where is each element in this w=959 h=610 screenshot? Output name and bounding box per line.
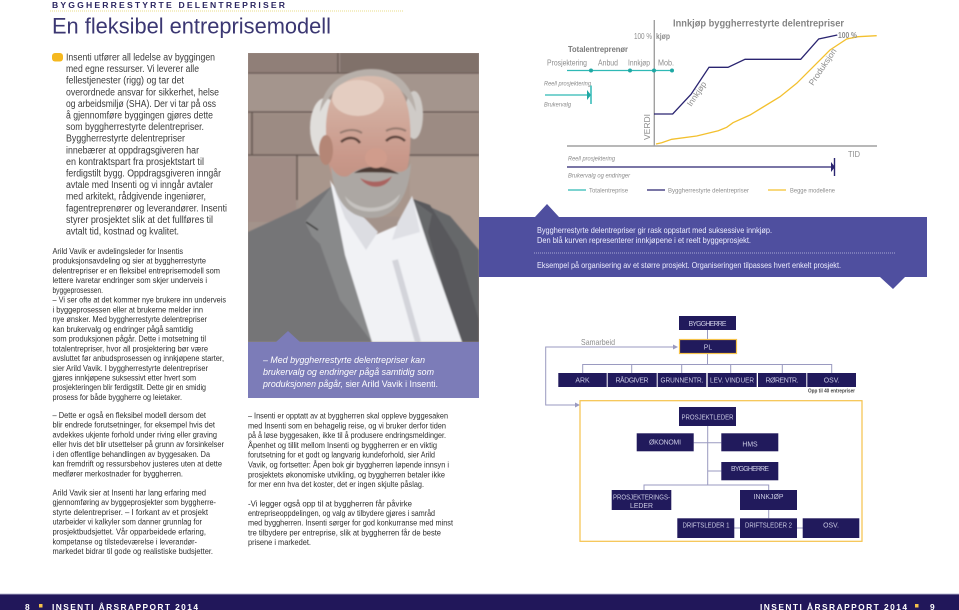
text block: intro: fellestjenester (rigg) og tar det (66, 76, 184, 87)
chart: purchasing curve (544, 18, 877, 194)
text block: open book: prosjektets økonomiske utvikling, og byggherren betaler ikke (248, 469, 445, 479)
text block: Arild Vavik interview: lettere ivaretar endringer som skjer underveis i (52, 275, 207, 285)
text block: open book: tre tilbydere per entreprise, slik at byggherren får de beste (248, 527, 441, 537)
text block: flexible model (52, 410, 224, 556)
text block: flexible model: medfører merkostnader for byggherren. (52, 468, 183, 478)
chart: purchasing curve: kjøp (656, 31, 670, 41)
text block: Arild Vavik interview: nye ønsker. Med byggherrestyrte delentrepriser (52, 314, 207, 324)
panel: blue explanation band (479, 204, 927, 289)
chart: purchasing curve: Brukervalg (544, 102, 571, 108)
org chart: project level: ARK (575, 378, 590, 384)
text block: flexible model: Arild Vavik sier at Insenti har lang erfaring med (52, 487, 206, 497)
chart: purchasing curve: Produksjon (806, 46, 839, 87)
text block: Arild Vavik interview: kan brukervalg og endringer pågå samtidig (52, 324, 193, 334)
text block: intro: og arbeidsmiljø (SHA). Der vi tar på oss (66, 99, 216, 110)
text block: Arild Vavik interview: produksjonsavdeling og sier at byggherrestyrte (52, 256, 206, 266)
panel: blue explanation band: Eksempel på organisering av et større prosjekt. Organiseringen tilpasses hvert enkelt prosjekt. (537, 260, 841, 270)
org chart: site organisation in yellow frame: LEDER (630, 503, 653, 510)
org chart: project level: PL (704, 344, 712, 352)
text block: Arild Vavik interview: som produksjonen pågår. Dette i motsetning til (52, 334, 206, 344)
text block: open book (248, 411, 453, 547)
text block: Arild Vavik interview: prosjekteringen blir ferdigstilt. Dette gir en smidig (52, 382, 206, 392)
text block: open book: med byggherren. Insenti sørger for god konkurranse med minst (248, 518, 453, 528)
icon: yellow bullet (52, 53, 63, 62)
text block: intro: innebærer at oppdragsgiveren har (66, 145, 200, 156)
org chart: project level: RØRENTR. (766, 378, 799, 384)
text block: open book: entrepriseoppdelingen, og valg av tilbydere gjøres i samråd (248, 508, 435, 518)
text block: intro: overordnede ansvar for sikkerhet, helse (66, 87, 219, 98)
org chart: site organisation in yellow frame: PROSJEKTERINGS- (613, 494, 670, 502)
org chart: project level: RÅDGIVER (616, 376, 649, 384)
text block: Arild Vavik interview: byggeprosessen. (52, 285, 103, 295)
org chart: project level: OSV. (824, 378, 840, 384)
text block: flexible model: markedet bidrar til gode og realistiske budsjetter. (52, 546, 213, 556)
text block: open book: med Insenti som en behagelig reise, og vi bruker derfor tiden (248, 420, 446, 430)
text block: open book: forutsetning for et godt og langvarig kundeforhold, sier Arild (248, 449, 435, 459)
caption panel: quote: brukervalg og endringer pågå samtidig som (263, 367, 434, 377)
text block: intro (66, 52, 227, 238)
panel: blue explanation band: Byggherrestyrte delentrepriser gir rask oppstart med suksessive innkjøp. (537, 226, 772, 235)
text block: Arild Vavik interview: i byggeprosessen eller at brukerne melder inn (52, 304, 203, 314)
text block: intro: avtale med Insenti og vi inngår avtaler (66, 180, 214, 191)
org chart: project level: GRUNNENTR. (660, 378, 704, 384)
text block: intro: som byggherrestyrte delentrepriser. (66, 122, 204, 133)
text block: flexible model: kan fremdrift og ressursbehov justeres uten at dette (52, 459, 222, 469)
kicker heading: BYGGHERRESTYRTE DELENTREPRISER (52, 0, 286, 10)
org chart: site organisation in yellow frame: DRIFTSLEDER 1 (682, 522, 730, 530)
org chart: site organisation in yellow frame (580, 401, 862, 541)
text block: flexible model: kompetanse og tilstedeværelse i leverandør- (52, 536, 197, 546)
chart: purchasing curve: Innkjøp (685, 79, 709, 108)
org chart: site organisation in yellow frame: INNKJØP (754, 494, 784, 501)
text block: flexible model: prosjektbudsjettet. Vår opparbeidede erfaring, (52, 527, 206, 537)
chart: purchasing curve: Prosjektering (547, 58, 587, 68)
text block: Arild Vavik interview: – Vi ser ofte at det kommer nye brukere inn underveis (52, 295, 227, 305)
caption panel: quote: – Med byggherrestyrte delentrepriser kan (262, 355, 425, 365)
org chart: site organisation in yellow frame: PROSJEKTLEDER (682, 414, 734, 422)
text block: intro: fagentreprenører og leverandører. Insenti (66, 203, 227, 214)
text block: intro: styrer prosjektet slik at det fullføres til (66, 215, 213, 226)
text block: flexible model: – Dette er også en fleksibel modell dersom det (52, 410, 207, 420)
chart: purchasing curve: Anbud (598, 58, 618, 68)
text block: intro: med arkitekt, rådgivende ingeniører, (66, 192, 206, 203)
text block: flexible model: utarbeider vi kalkyler som danner grunnlag for (52, 517, 202, 527)
chart: purchasing curve: 100 % (634, 31, 652, 41)
text block: intro: å gjennomføre byggingen gjøres dette (66, 110, 213, 122)
text block: intro: Insenti utfører all ledelse av byggingen (66, 52, 215, 64)
text block: intro: med egne ressurser. Vi leverer alle (66, 64, 199, 75)
caption panel: quote: produksjonen pågår, sier Arild Vavik i Insenti. (262, 379, 438, 389)
org chart: project level (546, 316, 856, 408)
chart: purchasing curve: Totalentreprenør (568, 45, 629, 54)
chart: purchasing curve: Mob. (658, 58, 674, 68)
chart: purchasing curve: 100 % (838, 30, 857, 40)
text block: Arild Vavik interview: totalentrepriser, hvor all prosjektering bør være (52, 343, 208, 353)
text block: open book: – Insenti er opptatt av at byggherren skal oppleve byggesaken (248, 411, 448, 421)
text block: open book: prisene i markedet. (248, 537, 311, 547)
text block: intro: Byggherrestyrte delentrepriser (66, 134, 186, 145)
text block: flexible model: avdekkes ukjente forhold under riving eller graving (52, 430, 217, 440)
chart legend (568, 188, 835, 194)
org chart: project level: Opp til 40 entrepriser (808, 388, 856, 394)
chart legend: Totalentreprise (589, 188, 628, 194)
panel: blue explanation band: Den blå kurven representerer innkjøpene i et reelt byggeprosjekt. (537, 235, 751, 245)
text block: Arild Vavik interview: prosess for både byggherre og leietaker. (52, 392, 182, 402)
text block: Arild Vavik interview: delentrepriser er en fleksibel entreprisemodell som (52, 266, 220, 276)
chart: purchasing curve: Reell prosjektering (568, 156, 615, 162)
org chart: site organisation in yellow frame: DRIFTSLEDER 2 (745, 522, 792, 530)
text block: Arild Vavik interview: Arild Vavik er avdelingsleder for Insentis (52, 246, 184, 256)
text block: open book: Vavik, og fortsetter: Åpen bok gir byggherren løpende innsyn i (248, 459, 449, 469)
chart: purchasing curve: Brukervalg og endringer (568, 172, 631, 180)
footer bar (0, 593, 959, 610)
cooperation arrows: Samarbeid (581, 337, 615, 347)
chart legend: Begge modellene (790, 188, 835, 194)
chart legend: Byggherrestyrte delentrepriser (668, 188, 750, 194)
text block: Arild Vavik interview: gjøres innkjøpene suksessivt etter hvert som (52, 372, 196, 382)
text block: Arild Vavik interview: avsluttet før anbudsprosessen og innkjøpene starter, (52, 353, 224, 363)
text block: intro: ferdigstilt bygg. Oppdragsgiveren inngår (66, 168, 222, 180)
text block: open book: på å løse byggesaken, ikke til å produsere endringsmeldinger. (248, 430, 446, 440)
org chart: site organisation in yellow frame: BYGGHERRE (731, 466, 769, 473)
text block: open book: Åpenhet og tillit mellom Insenti og byggherren er en viktig (248, 440, 437, 450)
org chart: project level: BYGGHERRE (688, 321, 727, 328)
text block: Arild Vavik interview (52, 246, 227, 402)
text block: flexible model: blir endrede forutsetninger, for eksempel hvis det (52, 420, 215, 430)
photo: portrait of Arild Vavik (248, 53, 480, 342)
chart: purchasing curve: TID (848, 149, 860, 159)
title: En fleksibel entreprisemodell (52, 14, 331, 38)
org chart: site organisation in yellow frame: ØKONOMI (649, 440, 681, 446)
org chart: project level: LEV. VINDUER (710, 378, 754, 384)
caption panel: quote (248, 331, 479, 398)
cooperation arrows (546, 337, 678, 408)
text block: open book: for mer enn hva det koster, det er ingen skjulte påslag. (248, 479, 424, 489)
text block: intro: en kontraktspart fra prosjektstart til (66, 157, 204, 168)
text block: intro: avtalt tid, kostnad og kvalitet. (66, 226, 179, 238)
text block: open book: -Vi legger også opp til at byggherren får påvirke (248, 498, 412, 508)
text block: flexible model: styrte delentrepriser. – I forkant av et prosjekt (52, 507, 209, 517)
chart: purchasing curve: Reell prosjektering (544, 80, 591, 88)
chart: purchasing curve: Innkjøp (628, 58, 650, 68)
chart: purchasing curve: VERDI (642, 114, 652, 140)
chart title: Innkjøp byggherrestyrte delentrepriser (673, 18, 844, 30)
text block: flexible model: eller hvis det blir utsettelser på grunn av forsinkelser (52, 439, 224, 449)
org chart: site organisation in yellow frame: OSV. (823, 522, 839, 530)
text block: flexible model: gjennomføring av byggeprosjekter som byggherre- (52, 497, 216, 507)
org chart: site organisation in yellow frame: HMS (742, 442, 758, 448)
text block: Arild Vavik interview: sier Arild Vavik. I byggherrestyrte delentrepriser (52, 363, 208, 373)
text block: flexible model: i den offentlige behandlingen av byggesaken. Da (52, 449, 210, 459)
